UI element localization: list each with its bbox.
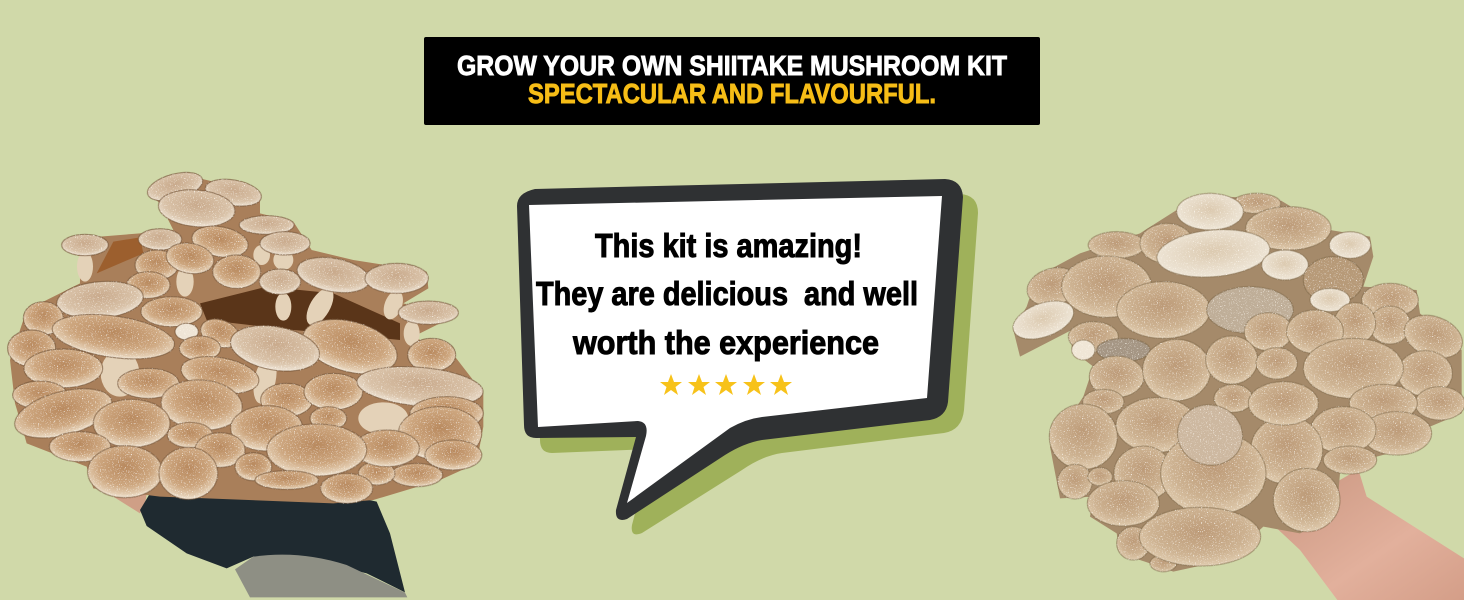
grey cuff: [235, 555, 407, 597]
photo: shiitake cluster on gloved hand: [8, 167, 485, 597]
stems: [77, 245, 420, 434]
title banner: SPECTACULAR AND FLAVOURFUL.: [528, 78, 936, 109]
review text: They are delicious and well: [536, 275, 918, 312]
hand fingers: [113, 486, 148, 513]
mushroom caps: [1008, 193, 1464, 572]
black glove: [140, 487, 405, 592]
speech bubble with review: [517, 179, 978, 534]
five star rating: [660, 374, 792, 395]
cluster silhouette: [10, 173, 483, 503]
photo: shiitake cluster held in bare hand: [1008, 193, 1464, 600]
title banner: [424, 37, 1040, 125]
mushroom caps: [8, 167, 485, 503]
forearm: [1273, 469, 1464, 600]
substrate patch: [200, 287, 400, 340]
review text: [536, 227, 918, 361]
orange substrate patch: [97, 237, 143, 273]
review text: This kit is amazing!: [595, 227, 862, 264]
title banner: GROW YOUR OWN SHIITAKE MUSHROOM KIT: [457, 50, 1007, 81]
review text: worth the experience: [572, 324, 879, 361]
cluster silhouette: [1013, 195, 1462, 572]
